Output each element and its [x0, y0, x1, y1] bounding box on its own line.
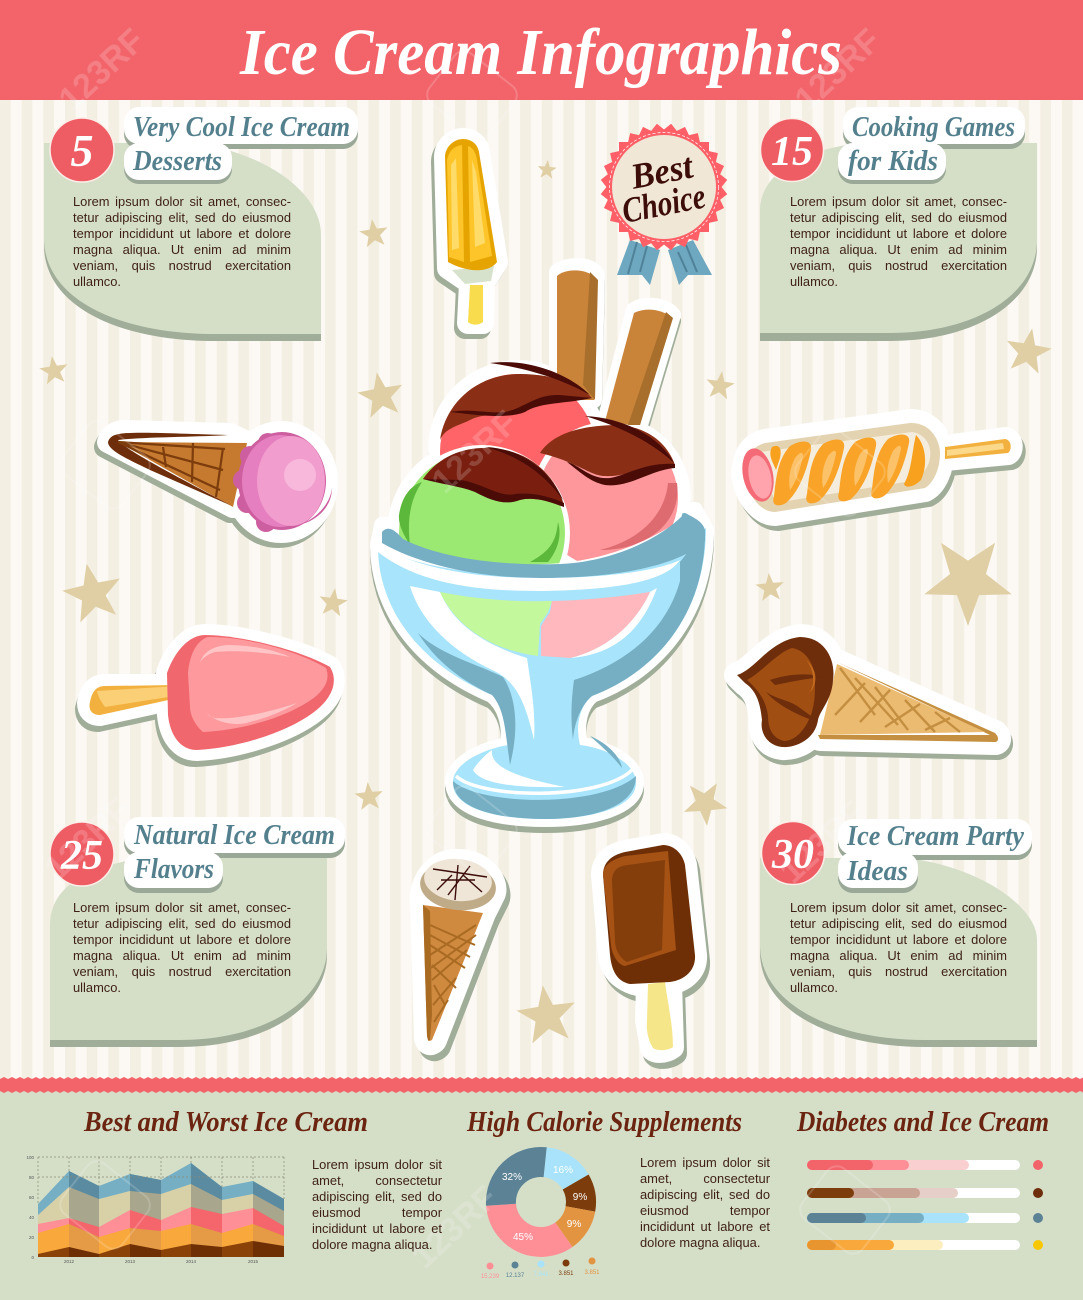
cup shading [571, 530, 705, 740]
foot [453, 776, 636, 819]
area chart: 0 [31, 1255, 34, 1260]
icon: twisted stick ice cream [738, 421, 1014, 519]
donut legend: 3.851 [584, 1270, 600, 1276]
text block: best and worst: adipiscing elit, sed do [312, 1189, 442, 1204]
text block: high calorie: eiusmod tempor [640, 1203, 770, 1218]
badge: best choice: Best [627, 145, 697, 197]
badge: best choice: Choice [619, 176, 709, 231]
area chart: 2012 [64, 1259, 75, 1264]
text block: cooking games: tempor incididunt ut labore et dolore [790, 226, 1007, 241]
area chart: 80 [29, 1175, 34, 1180]
right pink scoop [532, 416, 684, 574]
text block: party ideas: tempor incididunt ut labore et dolore [790, 932, 1007, 947]
text block: party ideas: veniam, quis nostrud exercitation [790, 964, 1007, 979]
donut legend: 15.239 [481, 1274, 500, 1280]
donut chart: 45% [513, 1232, 533, 1243]
text block: party ideas [790, 900, 1007, 995]
panel: very cool desserts [44, 143, 321, 341]
text block: desserts: veniam, quis nostrud exercitation [73, 258, 291, 273]
text block: desserts [73, 194, 291, 289]
text block: best and worst: incididunt ut labore et [312, 1221, 442, 1236]
text block: cooking games: Lorem ipsum dolor sit amet, consec- [790, 194, 1007, 209]
heading: very cool ice cream desserts: Desserts [132, 146, 222, 177]
heading: ice cream party ideas: Ideas [846, 856, 908, 887]
rear rim [382, 513, 705, 545]
text block: natural flavors: ullamco. [73, 980, 121, 995]
text block: high calorie: adipiscing elit, sed do [640, 1187, 770, 1202]
icon: pink popsicle [86, 635, 334, 756]
area chart: 2015 [248, 1259, 259, 1264]
text block: natural flavors [73, 900, 291, 995]
text block: high calorie [640, 1155, 770, 1250]
text block: desserts: magna aliqua. Ut enim ad minim [73, 242, 291, 257]
text block: high calorie: dolore magna aliqua. [640, 1235, 760, 1250]
donut chart: 9% [567, 1219, 581, 1230]
donut chart: 9% [573, 1192, 587, 1203]
heading: ice cream party ideas: Ice Cream Party [846, 821, 1025, 852]
watermarks: 123RF [425, 403, 525, 501]
text block: cooking games: tetur adipiscing elit, sed do eiusmod [790, 210, 1007, 225]
badge: number 30: 30 [771, 832, 814, 878]
area chart [26, 1155, 284, 1264]
watermarks: 123RF [52, 21, 152, 119]
scalloped divider [0, 1077, 1083, 1093]
heading: natural ice cream flavors [124, 817, 345, 893]
text block: cooking games [790, 194, 1007, 289]
badge: number 5 [50, 118, 114, 182]
icon: yellow popsicle [442, 139, 497, 328]
heading: best and worst: Best and Worst Ice Cream [83, 1106, 368, 1138]
heading: diabetes: Diabetes and Ice Cream [796, 1106, 1049, 1138]
panel: party ideas [760, 858, 1037, 1047]
heading: natural ice cream flavors: Flavors [133, 854, 214, 885]
text block: desserts: tempor incididunt ut labore et dolore [73, 226, 291, 241]
panel: natural flavors [50, 857, 327, 1047]
heading: cooking games for kids: for Kids [848, 146, 938, 177]
heading: very cool ice cream desserts: Very Cool Ice Cream [133, 112, 350, 143]
area chart: 2014 [186, 1259, 197, 1264]
striped background [0, 100, 1083, 1085]
heading: cooking games for kids [838, 107, 1025, 184]
text block: high calorie: incididunt ut labore et [640, 1219, 770, 1234]
text block: desserts: Lorem ipsum dolor sit amet, consec- [73, 194, 291, 209]
donut legend: 3.851 [558, 1271, 574, 1277]
text block: natural flavors: magna aliqua. Ut enim ad minim [73, 948, 291, 963]
text block: desserts: ullamco. [73, 274, 121, 289]
glass reflections [410, 586, 534, 740]
donut chart [486, 1147, 596, 1257]
text block: party ideas: tetur adipiscing elit, sed do eiusmod [790, 916, 1007, 931]
rosette [601, 124, 727, 250]
badge: number 15 [760, 118, 824, 182]
area chart: 60 [29, 1195, 34, 1200]
rim highlight [378, 545, 680, 591]
glass cup and foot [378, 528, 706, 819]
text block: cooking games: magna aliqua. Ut enim ad minim [790, 242, 1007, 257]
rim shadow band [382, 513, 705, 578]
donut legend: 7.841 [533, 1272, 549, 1278]
ribbons [617, 240, 712, 285]
watermarks: 123RF [38, 790, 138, 888]
bar: brown [807, 1188, 1043, 1198]
green refraction [440, 592, 552, 656]
text block: party ideas: Lorem ipsum dolor sit amet, consec- [790, 900, 1007, 915]
watermarks: 123RF [405, 1178, 505, 1276]
text block: best and worst [312, 1157, 442, 1252]
icon: chocolate cone [737, 637, 1000, 752]
pink refraction [541, 592, 650, 658]
text block: natural flavors: tetur adipiscing elit, sed do eiusmod [73, 916, 291, 931]
icon: ice cream sundae bowl [372, 266, 712, 825]
donut legend: 12.137 [506, 1273, 525, 1279]
badge: number 25: 25 [60, 833, 103, 879]
badge: number 25 [50, 822, 114, 886]
text block: best and worst: eiusmod tempor [312, 1205, 442, 1220]
bar: red [807, 1160, 1043, 1170]
badge: number 5: 5 [70, 125, 94, 176]
icon: nut topped cone [418, 856, 498, 1048]
bottom panel background [0, 1085, 1083, 1300]
text block: party ideas: ullamco. [790, 980, 838, 995]
heading: high calorie: High Calorie Supplements [466, 1106, 742, 1138]
text block: natural flavors: Lorem ipsum dolor sit amet, consec- [73, 900, 291, 915]
watermarks: 123RF [788, 21, 888, 119]
white rim over scoops [372, 505, 712, 590]
background stars [38, 159, 1055, 1045]
panel: cooking games [760, 143, 1037, 341]
text block: best and worst: amet, consectetur [312, 1173, 442, 1188]
text block: cooking games: veniam, quis nostrud exercitation [790, 258, 1007, 273]
text block: high calorie: Lorem ipsum dolor sit [640, 1155, 770, 1170]
area chart: 20 [29, 1235, 34, 1240]
donut chart: 32% [502, 1172, 522, 1183]
text block: cooking games: ullamco. [790, 274, 838, 289]
title: Ice Cream Infographics [239, 16, 842, 89]
icon: pink scoop cone [105, 431, 332, 537]
wafers [557, 270, 673, 425]
area chart: 40 [29, 1215, 34, 1220]
left green scoop [394, 445, 570, 621]
bar: blue [807, 1213, 1043, 1223]
back red scoop [436, 362, 600, 534]
bar: orange [807, 1240, 1043, 1250]
donut legend [481, 1258, 600, 1280]
watermarks: 123RF [773, 793, 873, 891]
header banner [0, 0, 1083, 100]
heading: ice cream party ideas [838, 819, 1032, 893]
badge: number 15: 15 [771, 129, 813, 175]
heading: natural ice cream flavors: Natural Ice Cream [133, 820, 335, 851]
text block: best and worst: Lorem ipsum dolor sit [312, 1157, 442, 1172]
icon: chocolate popsicle [603, 845, 698, 1057]
text block: desserts: tetur adipiscing elit, sed do eiusmod [73, 210, 291, 225]
heading: cooking games for kids: Cooking Games [852, 112, 1015, 143]
watermarks [38, 21, 895, 1276]
text block: party ideas: magna aliqua. Ut enim ad minim [790, 948, 1007, 963]
text block: high calorie: amet, consectetur [640, 1171, 770, 1186]
heading: very cool ice cream desserts [124, 107, 358, 184]
text block: natural flavors: tempor incididunt ut labore et dolore [73, 932, 291, 947]
donut chart: 16% [553, 1165, 573, 1176]
badge: best choice [601, 124, 727, 285]
text block: best and worst: dolore magna aliqua. [312, 1237, 432, 1252]
area chart: 2013 [125, 1259, 136, 1264]
area chart: 100 [26, 1155, 34, 1160]
badge: number 30 [762, 822, 824, 884]
text block: natural flavors: veniam, quis nostrud exercitation [73, 964, 291, 979]
